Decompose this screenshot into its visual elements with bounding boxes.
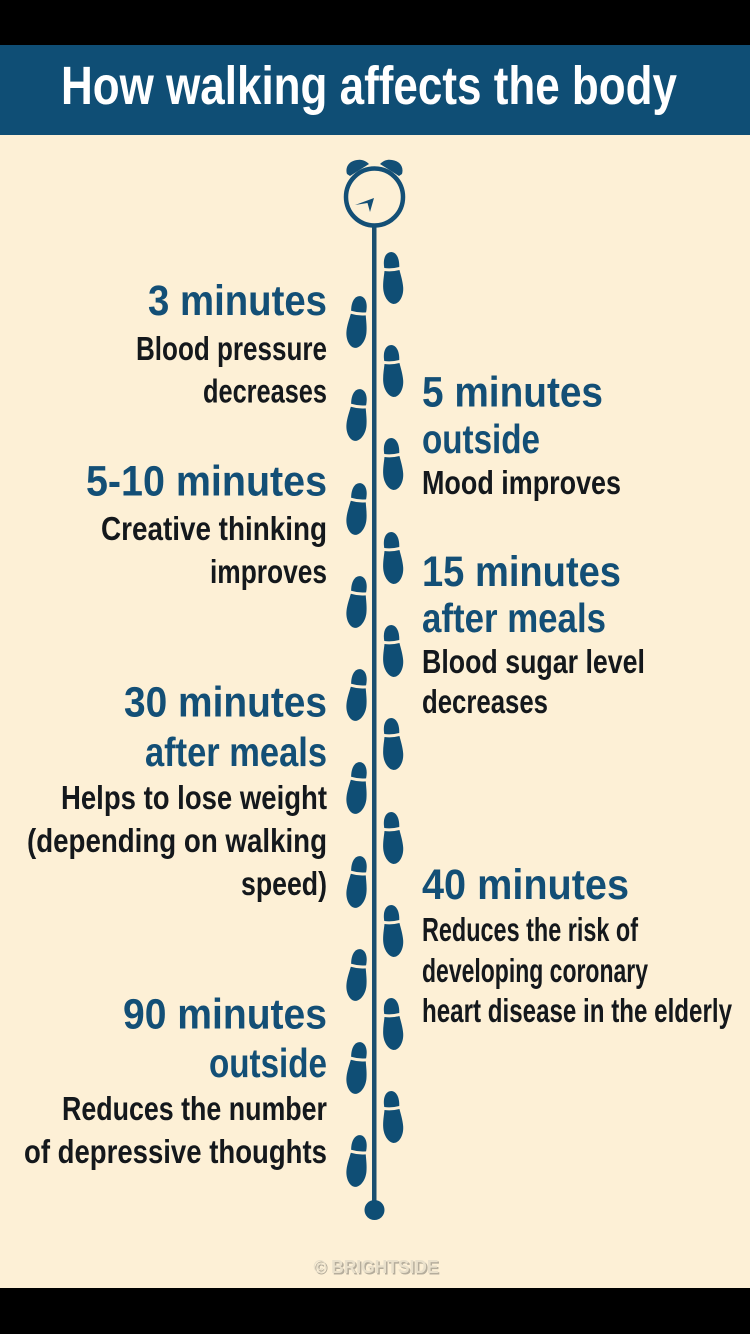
text block: 3 minutes: 3 minutes — [148, 277, 327, 325]
text block: 5-10 minutes — [86, 458, 327, 590]
text block: 90 minutes outside: of depressive thoughts — [24, 1133, 327, 1170]
text block: 90 minutes outside: outside — [209, 1040, 327, 1086]
timeline vertical line — [372, 225, 376, 1210]
text block: 3 minutes: decreases — [203, 372, 327, 410]
watermark: © BRIGHTSIDE — [314, 1257, 438, 1277]
text block: 90 minutes outside — [24, 990, 327, 1170]
text block: 5-10 minutes: 5-10 minutes — [86, 458, 327, 506]
text block: 5-10 minutes: Creative thinking — [101, 510, 327, 547]
text block: 90 minutes outside: 90 minutes — [123, 990, 327, 1038]
text block: 30 minutes after meals: speed) — [241, 865, 327, 902]
text block: 5 minutes outside — [422, 368, 621, 501]
timeline end dot — [364, 1200, 384, 1220]
text block: 30 minutes after meals: 30 minutes — [124, 678, 327, 726]
text block: 5 minutes outside: Mood improves — [422, 464, 621, 501]
text block: 30 minutes after meals — [27, 678, 327, 902]
text block: 5 minutes outside: outside — [422, 416, 540, 462]
text block: 3 minutes — [136, 277, 327, 410]
text block: 30 minutes after meals: after meals — [145, 729, 327, 775]
text block: 90 minutes outside: Reduces the number — [62, 1090, 327, 1127]
text block: 3 minutes: Blood pressure — [136, 330, 327, 367]
text block: 15 minutes after meals — [422, 548, 645, 720]
icon: alarm clock — [346, 160, 403, 226]
watermark: © BRIGHTSIDE — [315, 1258, 440, 1278]
right footprints — [381, 251, 404, 1144]
text block: 30 minutes after meals: (depending on walking — [27, 822, 327, 859]
text block: 40 minutes: developing coronary — [422, 952, 648, 989]
text block: 15 minutes after meals: Blood sugar level — [422, 643, 645, 680]
text block: 5-10 minutes: improves — [210, 553, 327, 590]
header band with title — [0, 45, 750, 135]
text block: 15 minutes after meals: after meals — [422, 595, 606, 641]
text block: 15 minutes after meals: 15 minutes — [422, 548, 621, 596]
text block: 40 minutes: 40 minutes — [422, 861, 629, 909]
left footprints — [345, 295, 370, 1188]
text block: 30 minutes after meals: Helps to lose weight — [61, 779, 327, 816]
text block: 40 minutes — [422, 861, 732, 1029]
text block: 15 minutes after meals: decreases — [422, 683, 548, 720]
text block: 40 minutes: Reduces the risk of — [422, 911, 639, 948]
text block: 5 minutes outside: 5 minutes — [422, 368, 603, 416]
